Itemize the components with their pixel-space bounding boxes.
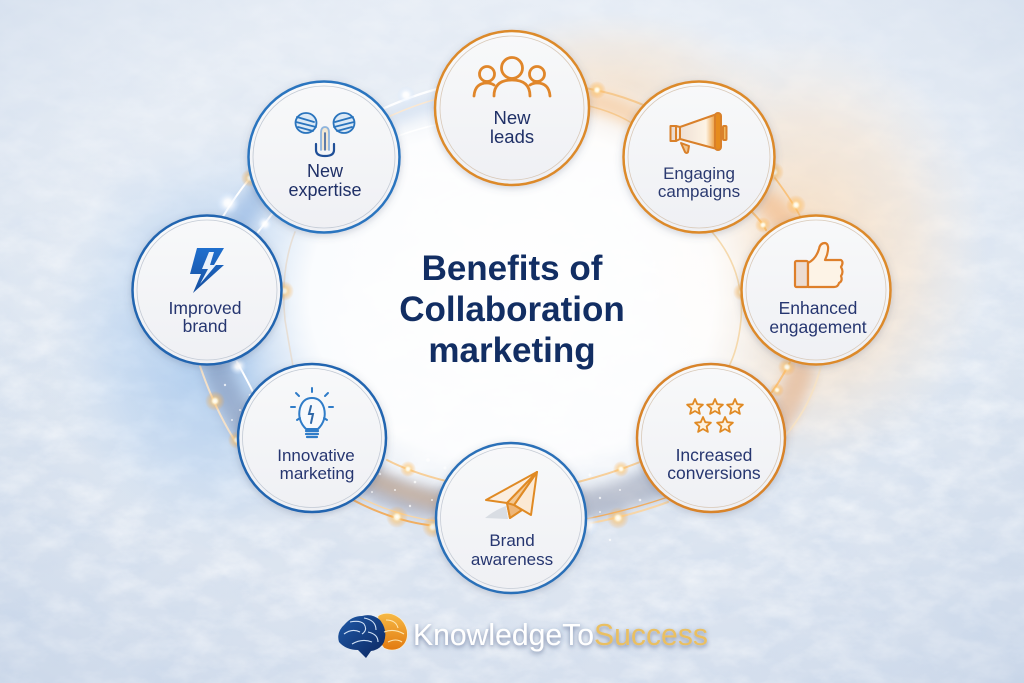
label: Engaging [663, 164, 735, 183]
icon: megaphone [670, 113, 726, 153]
icon: lightning bolt [190, 248, 224, 293]
title: Benefits of [422, 249, 603, 288]
panel: engaging campaigns [624, 82, 774, 232]
ring: glowing connector arcs [200, 86, 822, 526]
background glow: blue left, orange right, white centre [45, 10, 990, 555]
panel: increased conversions [637, 364, 785, 512]
icon: expertise [296, 113, 354, 156]
panel: new expertise [248, 82, 400, 232]
label: engagement [769, 317, 867, 337]
label: Improved [169, 298, 241, 318]
title: Collaboration [399, 290, 625, 329]
label: conversions [667, 463, 761, 483]
label: New [493, 107, 531, 128]
label: New [307, 161, 344, 181]
panel: innovative marketing [238, 364, 386, 512]
panel: brand awareness [436, 443, 586, 593]
label: awareness [471, 550, 553, 569]
ring: sparkles [205, 81, 806, 538]
panel: improved brand [132, 216, 282, 364]
wordmark: Success [594, 617, 708, 652]
label: leads [490, 126, 534, 147]
label: campaigns [658, 182, 740, 201]
title: marketing [428, 331, 596, 370]
wordmark: KnowledgeTo [413, 617, 594, 652]
ring band: tinted track between the arcs [218, 100, 800, 506]
label: brand [183, 316, 227, 336]
icon: light bulb [291, 388, 333, 437]
logo: KnowledgeToSuccess [338, 613, 708, 658]
icon: paper plane [485, 472, 537, 519]
panel: new leads [435, 31, 589, 185]
label: Innovative [277, 446, 355, 465]
label: expertise [288, 180, 362, 200]
label: Brand [489, 531, 535, 550]
panel: enhanced engagement [742, 216, 890, 364]
icon: brain [338, 613, 407, 658]
label: Increased [676, 445, 752, 465]
icon: stars [687, 399, 743, 432]
label: marketing [280, 464, 354, 483]
ring: speckle inside the band [224, 384, 656, 541]
label: Enhanced [779, 298, 857, 318]
icon: people [474, 58, 550, 96]
icon: thumbs up [795, 243, 842, 287]
